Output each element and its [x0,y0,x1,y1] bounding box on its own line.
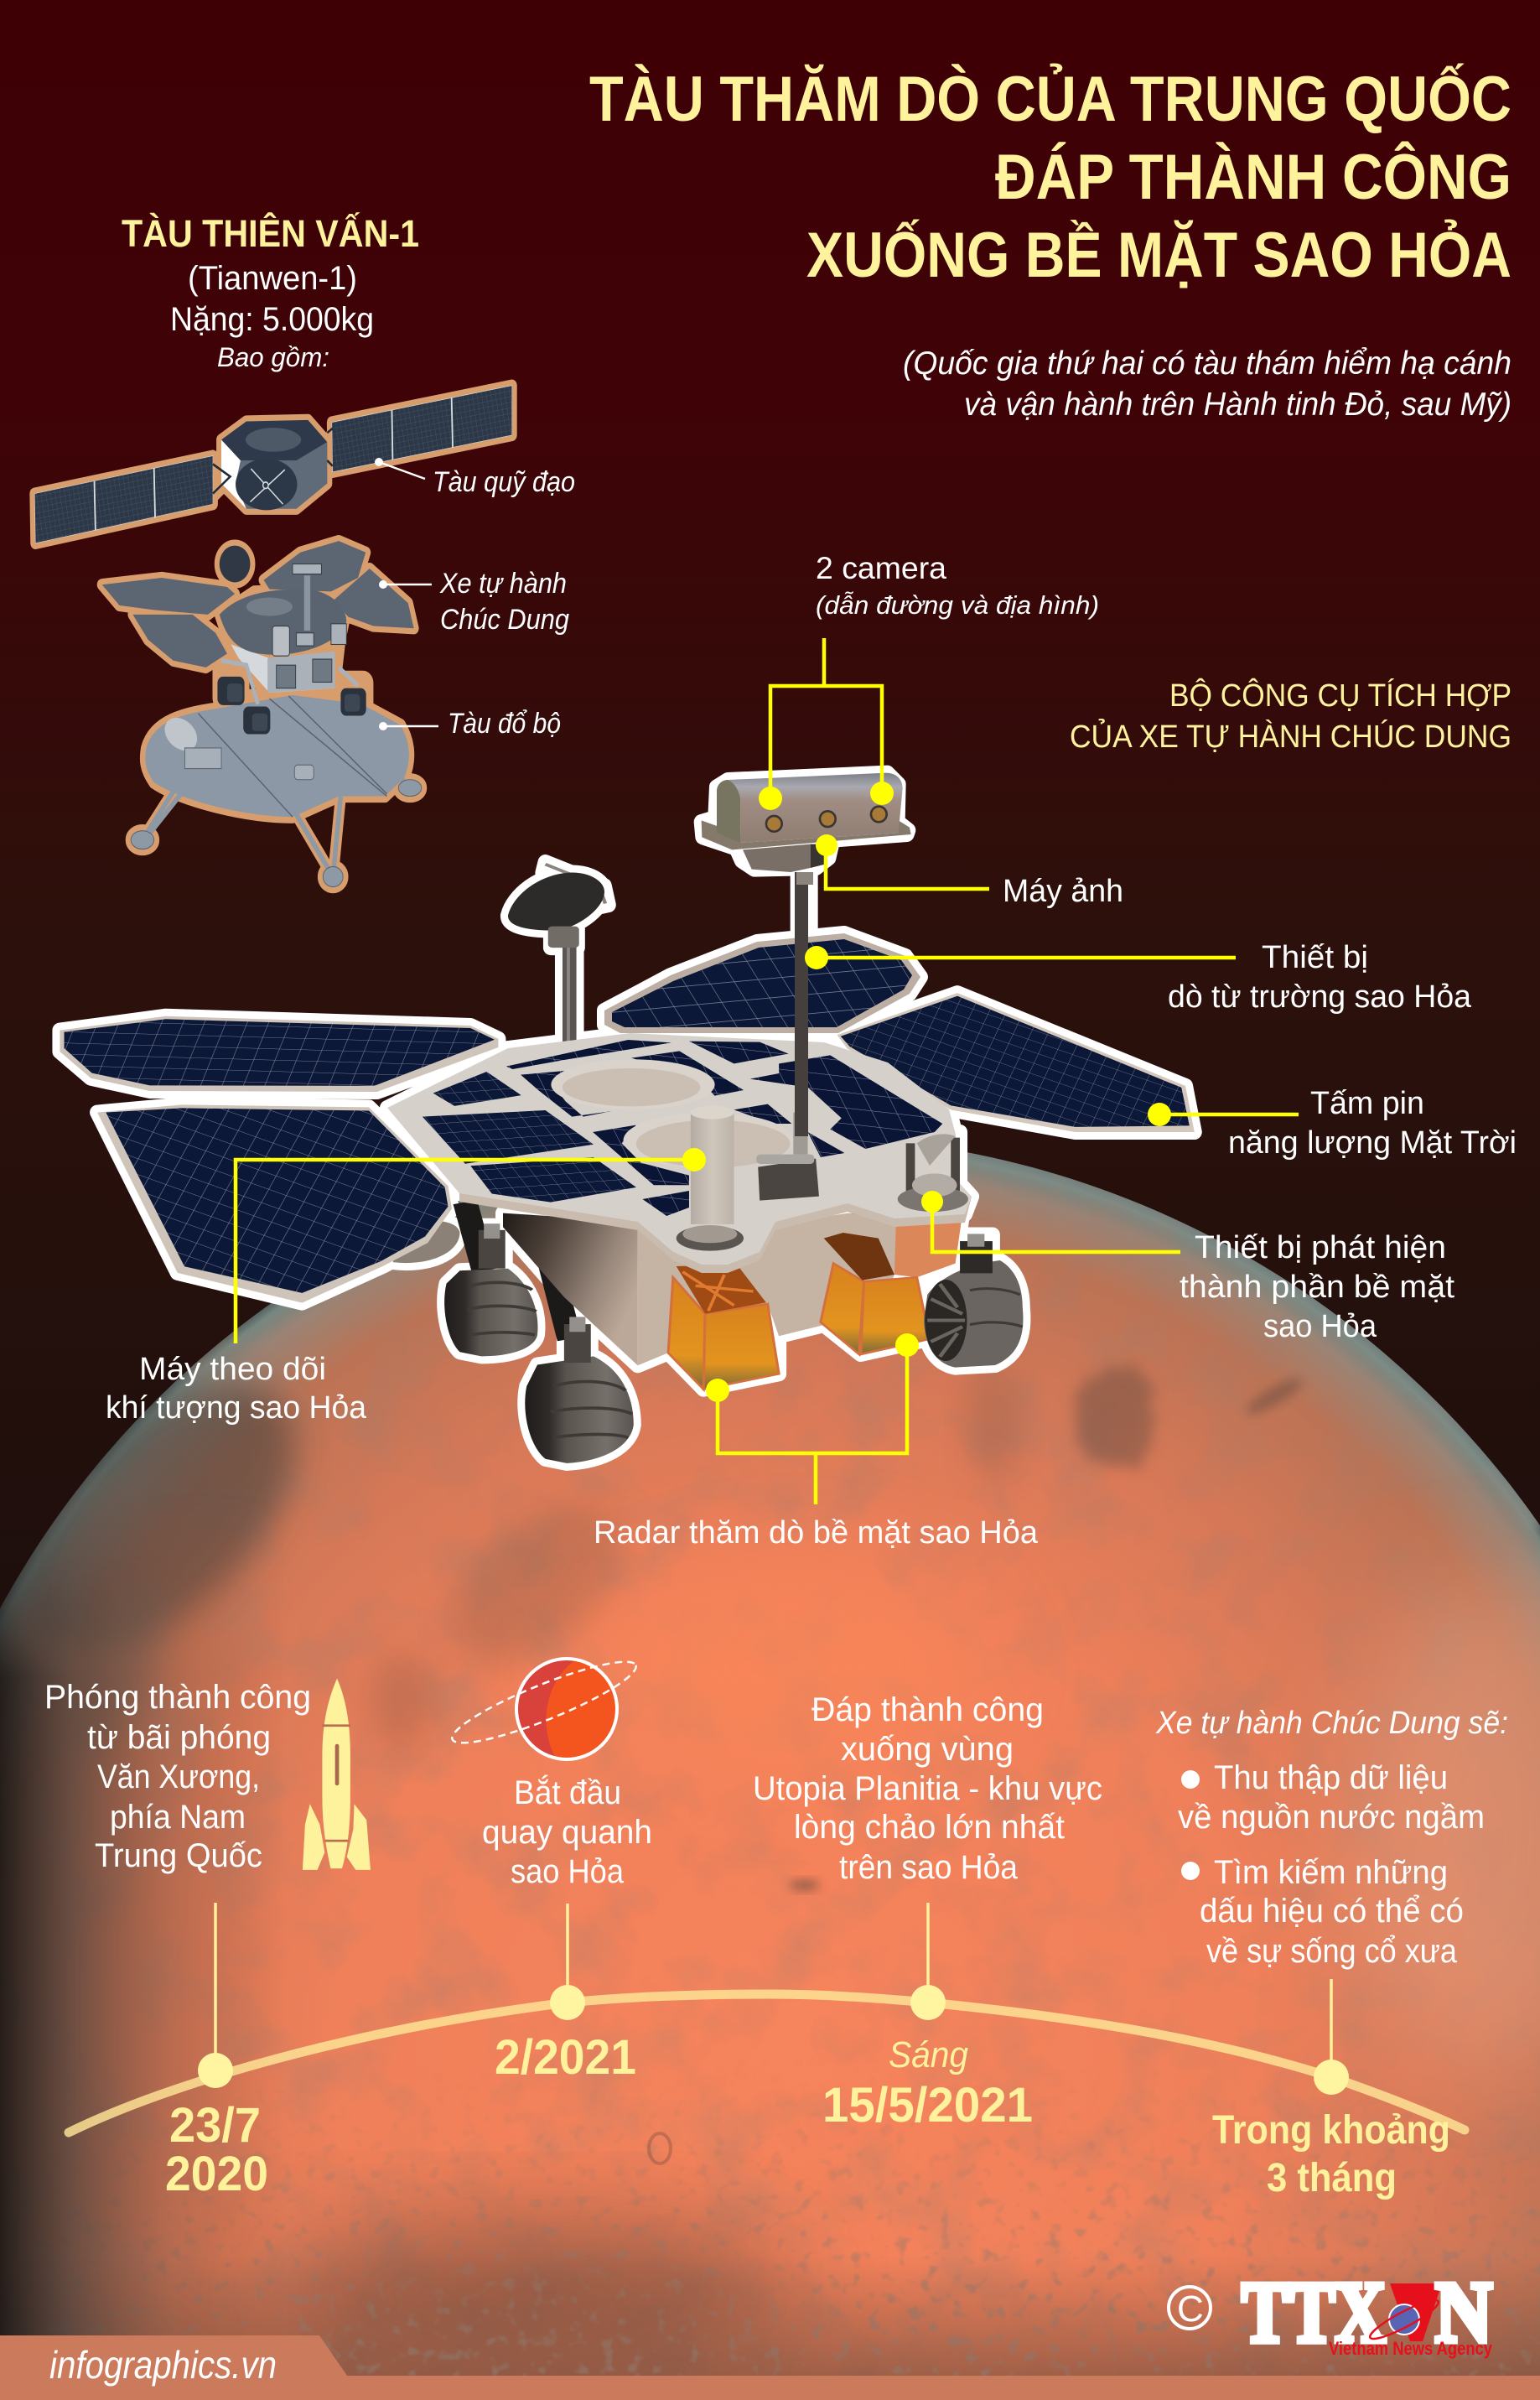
small craft labels: Tàu quỹ đạo [433,466,575,498]
instrument labels: (dẫn đường và địa hình) [816,590,1099,620]
milestone: landing text: lòng chảo lớn nhất [794,1809,1065,1846]
timeline arc [69,1903,1465,2132]
logo: TTXVN [1169,2264,1493,2361]
bottom strip [0,2335,1540,2400]
illustration: orbiter [34,386,512,543]
small craft labels: Tàu đổ bộ [448,708,561,740]
milestone: orbit text: Bắt đầu [514,1774,621,1811]
subtitle: (Quốc gia thứ hai có tàu thám hiểm hạ cánh [903,345,1511,382]
milestone: landing text: Đáp thành công [811,1691,1044,1728]
instrument labels: Tấm pin [1310,1086,1424,1121]
instrument labels: Thiết bị [1262,940,1368,975]
instrument labels: Máy ảnh [1003,874,1123,909]
heading: Tianwen-1 [122,212,419,372]
milestone: landing text: Utopia Planitia - khu vực [753,1770,1102,1807]
timeline dates: 2020 [165,2147,268,2201]
milestone: launch text: từ bãi phóng [87,1719,271,1756]
solar panel left lower [97,1104,452,1303]
instrument labels [106,551,1517,1551]
instrument labels: thành phần bề mặt [1180,1270,1454,1305]
milestone: orbit text [482,1774,652,1890]
heading: Tianwen-1: Bao gồm: [217,342,329,372]
milestone: rover tasks: về sự sống cổ xưa [1206,1933,1458,1970]
timeline dates: Sáng [889,2034,968,2075]
title [589,64,1511,291]
subtitle [903,345,1511,423]
solar panel back [604,933,920,1033]
timeline dates: 23/7 [169,2098,261,2153]
timeline dates: 15/5/2021 [822,2078,1033,2132]
milestone: landing text [753,1691,1102,1886]
logo: TTXVN: Vietnam News Agency [1329,2338,1493,2359]
small craft labels: Xe tự hành [439,568,567,600]
icon: rocket [303,1679,371,1870]
antenna [508,865,605,1044]
milestone: launch text: Phóng thành công [44,1679,311,1716]
milestone: rover tasks: Xe tự hành Chúc Dung sẽ: [1155,1706,1508,1741]
instrument labels: 2 camera [816,551,946,585]
lander body [131,695,422,887]
yellow callout dots [682,782,1171,1402]
yellow callout lines [236,638,1299,1504]
deck circular ports [551,1059,793,1168]
solar panel right [837,993,1195,1132]
deck [387,1033,972,1273]
wheels [444,1223,1023,1463]
planet Mars [0,1135,1540,2400]
milestone: rover tasks: dấu hiệu có thể có [1200,1893,1464,1930]
rover panels and body [102,541,414,734]
logo: TTXVN: N [1435,2264,1492,2361]
heading: Tianwen-1: TÀU THIÊN VẤN-1 [122,212,419,255]
timeline dates: Trong khoảng [1212,2108,1450,2153]
meteorological mast [677,1106,744,1251]
milestone: landing text: trên sao Hỏa [839,1849,1019,1886]
milestone: launch text: Trung Quốc [95,1837,262,1874]
instrument labels: sao Hỏa [1263,1309,1377,1344]
instrument labels: dò từ trường sao Hỏa [1168,979,1472,1015]
heading: Tianwen-1: Nặng: 5.000kg [170,301,374,338]
instrument labels: khí tượng sao Hỏa [106,1390,367,1426]
instrument labels: Máy theo dõi [139,1352,326,1387]
milestone: orbit icon [451,1657,637,1761]
milestone: rover tasks: Tìm kiếm những [1214,1854,1448,1891]
back wheel and suspension [393,1203,569,1339]
logo: TTXVN: C [1177,2288,1204,2330]
body walls [503,1213,962,1365]
website credit: infographics.vn [49,2343,277,2387]
milestone: rover tasks [1155,1706,1508,1970]
logo: TTXVN: TTX [1242,2264,1386,2361]
deck solar cells [423,1040,942,1216]
milestone: rover tasks: Thu thập dữ liệu [1214,1759,1448,1796]
milestone: orbit text: quay quanh [482,1814,652,1851]
radar antennas [668,1233,930,1390]
milestone: launch text [44,1679,311,1874]
section heading: integrated instruments: CỦA XE TỰ HÀNH CHÚC DUNG [1070,718,1511,755]
surface composition detector [898,1134,968,1212]
timeline dates: 3 tháng [1267,2156,1397,2200]
milestone: orbit text: sao Hỏa [511,1853,625,1890]
milestone: launch text: Văn Xương, [97,1758,260,1795]
milestone: rover tasks: về nguồn nước ngầm [1178,1799,1485,1836]
instrument labels: năng lượng Mặt Trời [1228,1125,1517,1161]
subtitle: và vận hành trên Hành tinh Đỏ, sau Mỹ) [964,387,1511,423]
heading: Tianwen-1: (Tianwen-1) [188,260,357,297]
milestone: landing text: xuống vùng [841,1731,1014,1768]
instrument labels: Thiết bị phát hiện [1195,1230,1446,1265]
mast base and pole [756,1113,819,1201]
solar panel left upper [60,1016,498,1092]
main rover illustration [60,773,1195,1463]
milestone: launch text: phía Nam [110,1799,246,1836]
small craft labels [375,458,575,740]
section heading: integrated instruments: BỘ CÔNG CỤ TÍCH HỢP [1169,677,1511,714]
section heading: integrated instruments [1070,677,1511,755]
small craft labels: Chúc Dung [440,604,569,636]
mast pole [795,872,808,1136]
instrument labels: Radar thăm dò bề mặt sao Hỏa [594,1515,1039,1551]
illustration: Zhurong rover small [102,541,422,887]
timeline dates [165,2030,1450,2201]
camera head [702,773,911,885]
white cut-out outline [60,773,1195,1463]
timeline dates: 2/2021 [495,2030,636,2085]
